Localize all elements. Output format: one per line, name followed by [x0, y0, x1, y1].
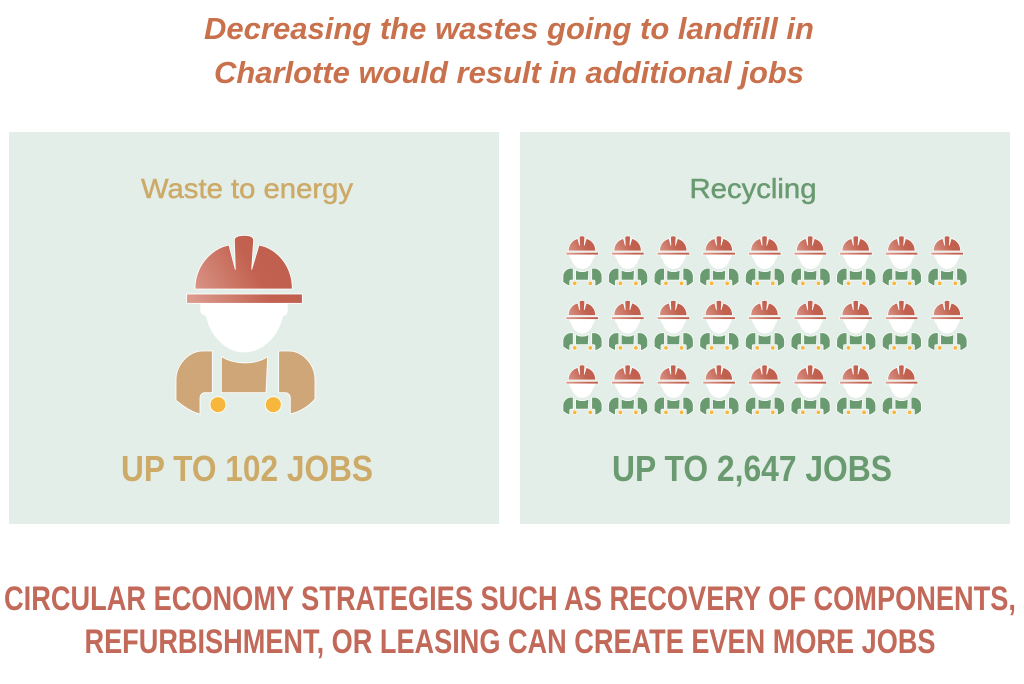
icon: large worker — [176, 235, 315, 414]
title second line: Charlotte would result in additional jobs — [214, 55, 804, 90]
title: Decreasing the wastes going to landfill in — [204, 11, 814, 46]
job count: recycling: UP TO 2,647 JOBS — [612, 448, 892, 489]
job count: waste to energy: UP TO 102 JOBS — [121, 448, 373, 489]
icon grid: small workers — [563, 236, 967, 415]
panel heading: waste to energy: Waste to energy — [141, 173, 353, 204]
panel: recycling — [520, 132, 1010, 524]
panel: waste to energy — [9, 132, 499, 524]
panel heading: recycling: Recycling — [690, 173, 816, 204]
